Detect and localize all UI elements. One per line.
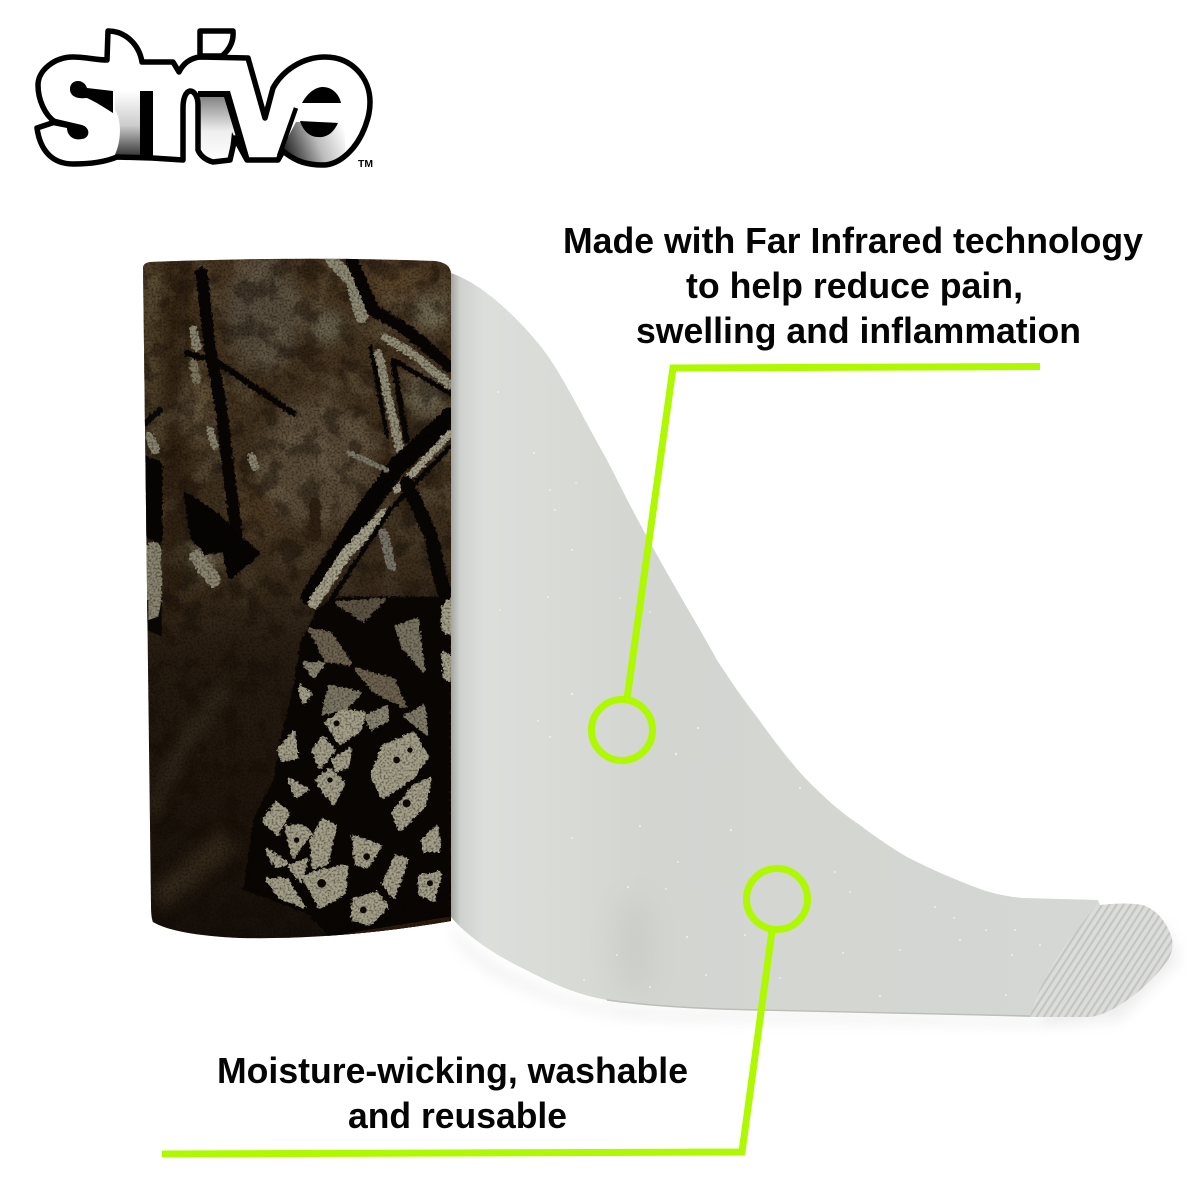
logo wordmark: strive xyxy=(46,57,364,182)
bandage ribbed end tab xyxy=(1030,903,1180,1024)
callout text xyxy=(563,220,1143,351)
fold shadow xyxy=(616,895,652,995)
logo outline xyxy=(37,31,370,165)
callout text: Made with Far Infrared technology xyxy=(563,220,1143,261)
callout: moisture-wicking xyxy=(162,868,808,1154)
bandage bottom edge xyxy=(607,1000,1030,1016)
callout text: and reusable xyxy=(348,1095,567,1136)
callout leader line and ring xyxy=(162,868,808,1154)
camo mottling xyxy=(145,260,451,575)
bandage: grey unrolled inner side xyxy=(451,273,1180,1024)
callout text: to help reduce pain, xyxy=(686,265,1023,306)
callout leader line and ring xyxy=(592,366,1040,760)
callout text: swelling and inflammation xyxy=(636,310,1081,351)
camouflage roll xyxy=(140,255,455,945)
bandage sparkles xyxy=(497,391,1041,997)
trademark: TM xyxy=(358,159,373,170)
camo soft patches xyxy=(143,257,448,603)
logo interior shading xyxy=(52,81,345,166)
logo i dot xyxy=(200,31,233,56)
callout text: Moisture-wicking, washable xyxy=(217,1050,688,1091)
callout: far infrared xyxy=(563,220,1143,760)
camo branches top xyxy=(145,260,450,610)
camo fabric grain xyxy=(140,255,455,945)
callout text xyxy=(217,1050,688,1136)
logo: strive xyxy=(37,31,373,182)
camo dark mottling xyxy=(140,255,455,945)
camo bark stones bottom xyxy=(147,597,451,937)
